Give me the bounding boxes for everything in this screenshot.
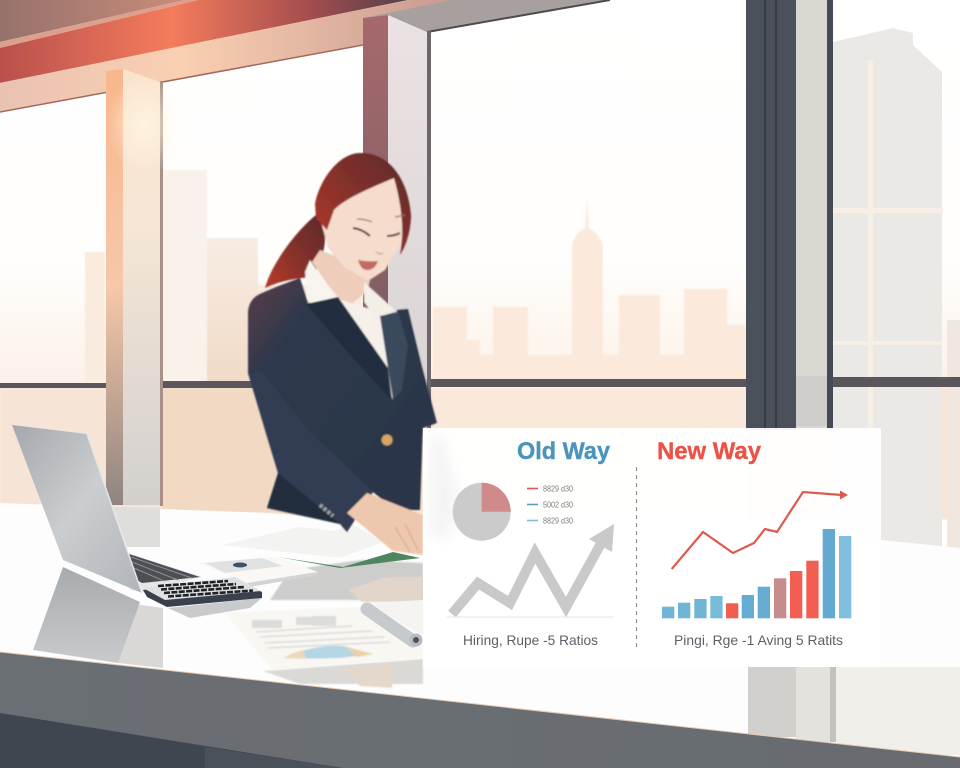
divider (636, 467, 638, 647)
hair (315, 153, 411, 255)
photo sheet (197, 557, 318, 587)
old way caption: Hiring, Rupe -5 Ratios (463, 632, 598, 648)
window sky (0, 0, 960, 520)
sleeve shading (248, 372, 373, 532)
ponytail (265, 212, 325, 288)
legend (527, 484, 573, 526)
lapel (306, 297, 392, 400)
legend: 8829 d30 (543, 484, 573, 494)
horizontal window mullion (0, 377, 960, 388)
rolled document (367, 600, 423, 646)
laptop (12, 425, 202, 593)
desk surface (0, 503, 960, 757)
hand (347, 493, 423, 555)
nose shadow (376, 252, 383, 254)
legend: 5002 d30 (543, 500, 573, 510)
new way heading: New Way (657, 438, 762, 465)
ceiling beams (0, 0, 610, 112)
right tower (833, 28, 960, 550)
new way trend arrow (672, 490, 848, 569)
pie chart (453, 483, 511, 541)
green folder (278, 552, 420, 568)
printed report (225, 607, 423, 670)
new way caption: Pingi, Rge -1 Aving 5 Ratits (674, 632, 843, 648)
button (382, 434, 392, 446)
bar chart (662, 529, 851, 618)
window glow (107, 75, 183, 175)
eyes and brows (353, 228, 400, 236)
legend: 8829 d30 (543, 516, 573, 526)
city skyline (0, 170, 960, 518)
old way baseline (447, 616, 613, 618)
jacket (248, 278, 437, 532)
faint arm seen through panel (430, 435, 460, 540)
shirt (335, 298, 397, 398)
paper under hand (222, 523, 383, 558)
calculator (143, 577, 262, 607)
window column right (746, 0, 833, 430)
mouth (358, 260, 378, 270)
old way heading: Old Way (517, 438, 611, 465)
face (320, 178, 405, 281)
window column centre (363, 15, 431, 431)
lapel right (380, 312, 408, 400)
old way arrow line (452, 524, 614, 614)
sleeve buttons (320, 505, 333, 516)
woman (248, 153, 437, 555)
window column left (106, 69, 163, 506)
comparison panel (423, 428, 881, 667)
collar right (364, 282, 395, 320)
collar left (305, 260, 338, 303)
desk front edge (0, 652, 960, 768)
neck (312, 250, 372, 310)
